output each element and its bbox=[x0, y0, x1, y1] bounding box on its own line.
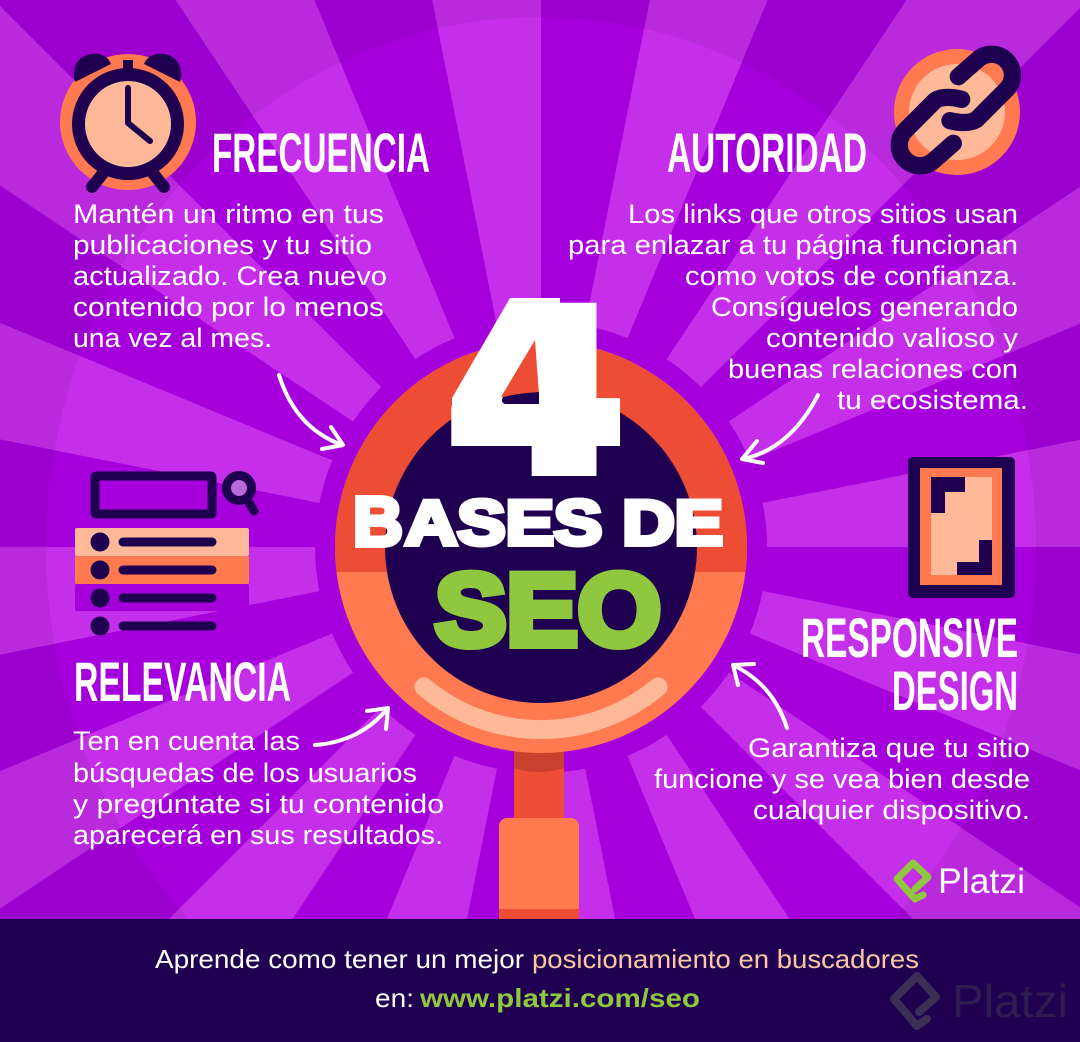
text: frecuencia body: Mantén un ritmo en tus bbox=[73, 199, 384, 229]
text: responsive design body: funcione y se vea bien desde bbox=[654, 764, 1030, 794]
text: frecuencia body bbox=[73, 199, 387, 353]
text: autoridad body: Los links que otros sitios usan bbox=[628, 199, 1018, 229]
panel: relevancia bbox=[73, 476, 444, 850]
footer call to action: en: bbox=[375, 983, 414, 1013]
watermark logo: Platzi bbox=[952, 975, 1068, 1027]
logo wordmark: Platzi bbox=[938, 862, 1025, 901]
arrow: autoridad to lens bbox=[742, 395, 818, 463]
panel: frecuencia bbox=[60, 54, 430, 449]
text: relevancia body: Ten en cuenta las bbox=[73, 726, 300, 756]
footer call to action: Aprende como tener un mejor bbox=[155, 944, 524, 974]
footer call to action: www.platzi.com/seo bbox=[419, 983, 700, 1013]
heading: relevancia: RELEVANCIA bbox=[74, 650, 291, 713]
panel: autoridad bbox=[568, 49, 1028, 463]
arrow: frecuencia to lens bbox=[279, 375, 343, 449]
icon: alarm clock bbox=[60, 54, 196, 190]
watermark logo bbox=[894, 975, 1068, 1027]
title line: bases de: B bbox=[353, 482, 403, 560]
text: responsive design body: Garantiza que tu sitio bbox=[748, 733, 1030, 763]
text: frecuencia body: publicaciones y tu sitio bbox=[73, 230, 372, 260]
text: autoridad body: contenido valioso y bbox=[766, 323, 1019, 353]
text: relevancia body: y pregúntate si tu contenido bbox=[73, 789, 444, 819]
title line: bases de bbox=[353, 482, 723, 560]
title line: SEO: SEO bbox=[435, 553, 661, 667]
icon: platzi diamond bbox=[897, 863, 928, 899]
text: relevancia body bbox=[73, 726, 444, 850]
text: frecuencia body: actualizado. Crea nuevo bbox=[73, 261, 387, 291]
text: autoridad body: tu ecosistema. bbox=[837, 385, 1028, 415]
text: frecuencia body: contenido por lo menos bbox=[73, 292, 384, 322]
logo: platzi bbox=[897, 862, 1025, 901]
title numeral 4: 4 bbox=[463, 270, 606, 509]
text: autoridad body: Consíguelos generando bbox=[711, 292, 1018, 322]
magnifying glass bbox=[335, 341, 747, 919]
arrow: responsive to lens bbox=[733, 664, 787, 728]
magnifier handle neck bbox=[514, 745, 564, 825]
text: relevancia body: búsquedas de los usuarios bbox=[73, 758, 417, 788]
heading: autoridad: AUTORIDAD bbox=[667, 121, 867, 184]
footer bar bbox=[0, 919, 1080, 1042]
numeral 4 counter bbox=[501, 340, 539, 404]
magnifier grip bbox=[499, 818, 579, 919]
icon: mobile device bbox=[908, 457, 1015, 598]
icon: chain link bbox=[894, 49, 1020, 175]
magnifier lens ring bbox=[335, 341, 747, 753]
text: responsive design body: cualquier dispositivo. bbox=[753, 795, 1030, 825]
text: autoridad body: para enlazar a tu página funcionan bbox=[568, 230, 1018, 260]
text: relevancia body: aparecerá en sus resultados. bbox=[73, 820, 443, 850]
text: frecuencia body: una vez al mes. bbox=[73, 323, 272, 353]
icon: search results bbox=[75, 476, 254, 636]
heading: frecuencia: FRECUENCIA bbox=[212, 121, 430, 184]
numeral 4 shoulder bbox=[452, 298, 560, 420]
heading: responsive design bbox=[801, 606, 1018, 722]
footer call to action: posicionamiento en buscadores bbox=[532, 944, 919, 974]
text: autoridad body: como votos de confianza. bbox=[685, 261, 1018, 291]
text: autoridad body bbox=[568, 199, 1028, 415]
title: 4 bases de SEO bbox=[353, 270, 723, 667]
title line: bases de: ASES DE bbox=[405, 488, 723, 558]
panel: responsive design bbox=[654, 457, 1030, 825]
text: responsive design body bbox=[654, 733, 1030, 825]
arrow: relevancia to lens bbox=[315, 708, 388, 745]
footer call to action bbox=[155, 944, 919, 1013]
text: autoridad body: buenas relaciones con bbox=[728, 354, 1018, 384]
